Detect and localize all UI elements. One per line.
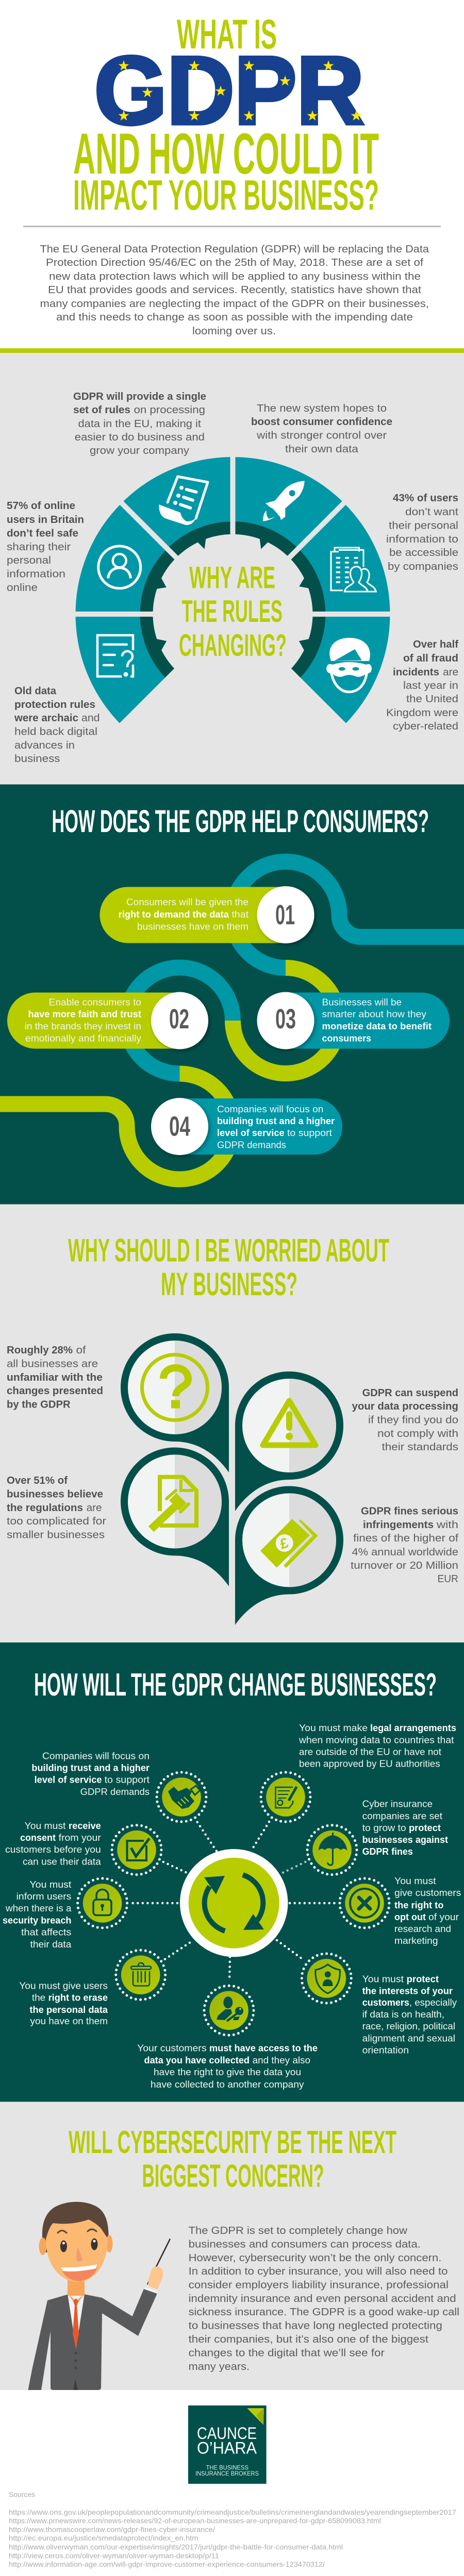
text block: single set of rules: set of rules [73,404,130,416]
panel: why should I be worried [0,1205,464,1642]
text block: over 51 percent: Over 51% of [7,1475,68,1486]
text block: cybersecurity paragraph: sickness insurance. The GDPR is a good wake-up call [189,2307,459,2318]
heading: why are the rules changing: THE RULES [181,594,283,629]
text block: cybersecurity paragraph: In addition to cyber insurance, you will also need to [189,2266,448,2277]
step 02: 02 [169,1004,189,1035]
text block: protect customers: race, religion, political [362,2021,455,2031]
step 01: that [232,909,248,920]
logo: Caunce O'Hara: CAUNCE [197,2424,257,2443]
text block: building trust [31,1751,150,1797]
text block: over 51 percent: the regulations [7,1502,83,1514]
text block: GDPR fines: with [436,1519,458,1531]
text block: fraud incidents [386,639,458,732]
step 02 [7,992,208,1049]
step 02: in the brands they invest in [25,1021,141,1031]
text block: introduction: and this needs to change as soon as possible with the impending date [56,312,413,323]
dotted connectors [133,1822,335,1981]
heading: will cybersecurity be the next biggest concern [69,2125,396,2194]
illustration: businessman with pointer [28,2202,170,2390]
text block: suspend data processing: not comply with [377,1428,458,1439]
text block: right to opt out: opt out [394,1912,426,1922]
text block: protect customers [362,1974,457,2056]
step 03: 03 [275,1004,296,1035]
text block: fraud incidents: cyber-related [393,721,458,732]
text block: right to opt out: the right to [394,1900,443,1910]
text block: cybersecurity paragraph: businesses and consumers can process data. [189,2239,421,2250]
text block: building trust: building trust and a higher [31,1762,150,1773]
step 03: consumers [322,1033,371,1044]
text block: suspend data processing: your data processing [352,1401,458,1412]
text block: cybersecurity paragraph: their companies, but it’s also one of the biggest [189,2334,428,2345]
node: contract and pen [261,1772,310,1822]
text block: legal arrangements: when moving data to countries that [299,1735,454,1745]
text block: protect customers: You must [362,1974,404,1984]
text block: GDPR fines: GDPR fines serious [361,1505,458,1517]
node: handshake [157,1772,206,1822]
panel: footer [0,2390,464,2575]
text block: GDPR fines: fines of the higher of [353,1533,458,1544]
text block: security breach: inform users [16,1891,71,1902]
text block: single set of rules: GDPR will provide a single [73,391,206,402]
text block: old data protection rules: advances in [14,740,75,751]
icon: person in circle [98,546,141,588]
text block: suspend data processing: GDPR can suspend [362,1387,458,1399]
text block: fraud incidents: are [443,667,458,678]
text block: access to data: data you have collected [144,2055,250,2065]
step 03: Businesses will be [322,997,402,1008]
text block: receive consent [5,1821,102,1867]
step 03: smarter about how they [322,1009,426,1019]
text block: access to data: have collected to another company [151,2079,304,2090]
text block: fraud incidents: last year in [403,680,458,691]
text block: building trust: level of service [35,1774,102,1785]
text block: receive consent: can use their data [23,1856,102,1867]
text block: receive consent: You must [25,1821,65,1831]
text block: legal arrangements: been approved by EU authorities [299,1758,440,1769]
text block: right to opt out: of your [428,1912,459,1922]
text block: suspend data processing: their standards [382,1442,458,1453]
text block: legal arrangements: You must make [299,1723,368,1733]
text block: GDPR fines: turnover or 20 Million [351,1560,458,1571]
text block: single set of rules: easier to do business and [75,432,205,443]
heading: why are the rules changing [179,561,287,663]
text block: suspend data processing [352,1387,458,1453]
text block: sources: http://view.ceros.com/oliver-wyman/oliver-wyman-desktop/p/11 [9,2551,219,2560]
icon: document checklist [159,477,208,525]
text block: security breach: their data [30,1939,72,1950]
icon: rocket [263,481,305,521]
text block: sources: Sources [9,2490,35,2499]
text block: right to opt out: research and [394,1924,451,1934]
text block: cybersecurity paragraph: many years. [189,2361,250,2372]
text block: suspend data processing: if they find you do [368,1415,458,1426]
node: protective shield [302,1954,351,2003]
text block: right to erase: the personal data [29,2005,108,2015]
text block: 43 percent of users: information to [386,534,458,545]
text block: right to erase: the [32,1992,45,2003]
text block: security breach: security breach [3,1916,71,1926]
text block: cybersecurity paragraph: The GDPR is set to completely change how [189,2225,408,2236]
step 04: 04 [169,1111,190,1142]
step 02: have more faith and trust [28,1009,141,1019]
step 04: level of service [217,1128,285,1138]
text block: roughly 28 percent: changes presented [7,1385,103,1397]
text block: access to data [137,2043,318,2090]
text block: cyber insurance: GDPR fines [362,1846,413,1857]
node: umbrella [307,1825,357,1875]
step 04 [151,1098,342,1155]
text block: consumer confidence: The new system hopes to [257,403,387,414]
text block: 43 percent of users: by companies [388,561,458,572]
text block: security breach: You must [29,1879,71,1890]
text block: fraud incidents: incidents [393,667,439,678]
text block: receive consent: receive [69,1821,101,1831]
step 01 [100,886,314,943]
text block: single set of rules: grow your company [90,445,189,456]
text block: cyber insurance: Cyber insurance [362,1799,433,1809]
text block: old data protection rules: protection rules [14,699,95,710]
heading: GDPR with EU stars: GDPR [94,37,364,144]
step 02: Enable consumers to [49,997,141,1008]
text block: introduction [40,244,429,337]
text block: old data protection rules: business [14,753,60,765]
icon: office building and people [331,548,376,591]
text block: 57 percent of online users [7,500,84,594]
text block: old data protection rules [14,685,100,765]
text block: 43 percent of users: their personal [389,520,458,532]
text block: security breach [3,1879,72,1950]
text block: right to erase [19,1980,108,2026]
node: check box [112,1825,161,1875]
step 04: building trust and a higher [217,1116,335,1126]
panel: title and introduction [0,0,464,348]
ribbon path connecting steps [0,861,464,1179]
text block: cyber insurance: to grow to [362,1823,406,1833]
text block: over 51 percent: smaller businesses [7,1529,105,1540]
text block: over 51 percent [7,1475,106,1540]
text block: 43 percent of users: don’t want [405,506,459,518]
step 01: businesses have on them [137,921,248,931]
text block: right to erase: You must give users [19,1980,108,1991]
pin: question mark [121,1333,229,1472]
text block: 43 percent of users [386,493,459,572]
logo: Caunce O'Hara: O’HARA [197,2439,257,2458]
heading: why are the rules changing: WHY ARE [189,561,275,595]
text block: roughly 28 percent: all businesses are [7,1358,98,1369]
text block: protect customers: alignment and sexual [362,2033,455,2043]
hub: change arrows [180,1849,288,1957]
step 03 [257,992,450,1049]
text block: fraud incidents: of all fraud [403,653,458,664]
step 04: to support [287,1128,332,1138]
text block: legal arrangements: are outside of the EU or have not [299,1747,441,1757]
step 04: Companies will focus on [217,1104,323,1114]
step 03: monetize data to benefit [322,1021,432,1031]
text block: consumer confidence: their own data [285,444,359,455]
logo: Caunce O'Hara: THE BUSINESS [206,2464,248,2471]
text block: 57 percent of online users: personal [7,555,51,566]
node: opt out cross [340,1878,389,1928]
text block: sources: http://www.information-age.com/will-gdpr-improve-customer-experience-consumers-123470312/ [9,2560,325,2568]
text block: sources: http://ec.europa.eu/justice/smedataprotect/index_en.htm [9,2534,198,2542]
text block: building trust: GDPR demands [80,1787,150,1797]
panel: how will the GDPR change businesses [0,1642,464,2102]
pin: legal document with gavel [121,1448,229,1586]
text block: receive consent: from your [59,1833,101,1843]
text block: receive consent: customers before you [5,1844,101,1855]
heading: why should I be worried about my business: MY BUSINESS? [161,1266,297,1302]
text block: old data protection rules: held back digital [14,726,97,738]
text block: cybersecurity paragraph: changes to the digital that we’ll see for [189,2348,385,2359]
panel: how does the GDPR help consumers [0,784,464,1205]
text block: access to data: and they also [253,2055,310,2065]
text block: old data protection rules: were archaic [14,713,78,724]
text block: sources [9,2490,456,2568]
step 01: 01 [275,900,295,930]
node: person and key [204,1986,254,2035]
text block: GDPR fines: EUR [437,1573,458,1585]
text block: right to erase: you have on them [30,2016,108,2026]
heading: what is: WHAT IS [177,11,277,58]
text block: single set of rules: data in the EU, making it [78,418,201,430]
text block: cybersecurity paragraph: consider employers liability insurance, professional [189,2279,449,2291]
heading: why are the rules changing: CHANGING? [179,628,287,663]
text block: 57 percent of online users: online [7,582,38,594]
heading: why should I be worried about my business [68,1232,389,1302]
step 01: Consumers will be given the [126,897,248,907]
text block: protect customers: protect [407,1974,439,1984]
text block: roughly 28 percent: by the GDPR [7,1399,71,1411]
text block: access to data: must have access to the [209,2043,318,2054]
text block: single set of rules: on processing [134,404,205,416]
text block: roughly 28 percent: Roughly 28% [7,1345,73,1356]
text block: introduction: looming over us. [192,326,276,337]
text block: introduction: The EU General Data Protection Regulation (GDPR) will be replacing the Data [40,244,429,255]
text block: 43 percent of users: be accessible [389,547,458,558]
text block: cyber insurance [362,1799,448,1857]
text block: right to erase: right to erase [48,1992,108,2003]
text block: over 51 percent: businesses believe [7,1489,103,1500]
text block: right to opt out [394,1876,461,1946]
text block: cybersecurity paragraph: However, cybersecurity won’t be the only concern. [189,2252,441,2264]
text block: consumer confidence: with stronger control over [256,430,387,441]
pin: warning triangle [235,1371,343,1511]
text block: consumer confidence: boost consumer confidence [251,416,392,428]
text block: security breach: that affects [21,1927,71,1938]
text block: 43 percent of users: 43% of users [393,493,458,504]
text block: single set of rules [73,391,206,456]
text block: right to opt out: You must [394,1876,436,1886]
step 02: emotionally and financially [25,1033,141,1044]
text block: 57 percent of online users: users in Britain [7,514,84,526]
text block: cyber insurance: protect [409,1823,441,1833]
text block: protect customers: customers [362,1997,409,2008]
text block: 57 percent of online users: don’t feel safe [7,528,78,539]
text block: sources: http://www.oliverwyman.com/our-expertise/insights/2017/jun/gdpr-the-battle-for-consumer-data.html [9,2543,343,2551]
text block: sources: http://www.thomascooperlaw.com/gdpr-fines-cyber-insurance/ [9,2526,215,2534]
text block: introduction: Protection Direction 95/46/EC on the 25th of May, 2018. These are a set of [46,257,423,268]
text block: GDPR fines: 4% annual worldwide [352,1547,458,1558]
icon: document with question mark [97,635,133,677]
text block: cybersecurity paragraph [189,2225,459,2372]
text block: fraud incidents: the United [406,693,458,705]
text block: cyber insurance: businesses against [362,1835,448,1845]
text block: roughly 28 percent: of [76,1345,86,1356]
text block: right to opt out: marketing [394,1936,438,1946]
text block: building trust: to support [105,1774,150,1785]
text block: fraud incidents: Kingdom were [386,707,458,719]
pin: money: £ [278,1535,290,1552]
step 01: right to demand the data [119,909,229,920]
text block: sources: https://www.ons.gov.uk/peoplepopulationandcommunity/crimeandjustice/bulletins/crimeinenglandandwales/yearendingseptember2017 [9,2508,456,2516]
text block: old data protection rules: and [81,713,100,724]
text block: fraud incidents: Over half [413,639,458,650]
text block: cybersecurity paragraph: to businesses that have long neglected protecting [189,2320,442,2332]
text block: introduction: new data protection laws which will be applied to any business within the [49,271,421,282]
step 04: GDPR demands [217,1140,286,1150]
text block: over 51 percent: are [87,1502,102,1514]
text block: GDPR fines [351,1505,458,1585]
text block: 57 percent of online users: sharing their [7,541,71,553]
text block: protect customers: the interests of your [362,1986,453,1996]
text block: cybersecurity paragraph: indemnity insurance and even personal accident and [189,2293,456,2304]
text block: introduction: EU that provides goods and services. Recently, statistics have shown that [48,284,421,296]
pin: money [235,1486,343,1625]
text block: protect customers: orientation [362,2045,409,2056]
text block: roughly 28 percent [7,1345,103,1411]
logo: Caunce O'Hara: INSURANCE BROKERS [195,2470,259,2477]
node: padlock [78,1878,127,1928]
text block: protect customers: if data is on health, [362,2009,444,2020]
text block: receive consent: consent [20,1833,56,1843]
text block: access to data: Your customers [137,2043,207,2054]
text block: legal arrangements: legal arrangements [370,1723,456,1733]
text block: sources: https://www.prnewswire.com/news-releases/92-of-european-businesses-are-unprepared-for-gdpr-658099083.html [9,2517,381,2525]
text block: roughly 28 percent: unfamiliar with the [7,1372,103,1383]
icon: masked thief [326,638,372,692]
text block: access to data: have the right to give the data you [154,2067,301,2077]
panel: will cybersecurity be the next biggest concern [0,2102,464,2390]
text block: building trust: Companies will focus on [42,1751,150,1761]
logo: Caunce O'Hara [188,2405,267,2484]
node: bin [116,1950,165,1999]
text block: over 51 percent: too complicated for [7,1516,106,1527]
text block: GDPR fines: infringements [363,1519,434,1531]
chart: segmented arch [68,453,398,775]
text block: legal arrangements [299,1723,456,1769]
text block: cyber insurance: companies are set [362,1811,442,1821]
text block: 57 percent of online users: information [7,569,65,580]
text block: consumer confidence [251,403,392,455]
text block: introduction: many companies are neglecting the impact of the GDPR on their businesses, [40,298,429,310]
text block: 57 percent of online users: 57% of online [7,500,75,512]
text block: protect customers: , especially [409,1997,457,2008]
text block: old data protection rules: Old data [14,685,57,697]
text block: right to opt out: give customers [394,1888,461,1898]
text block: security breach: when there is a [5,1903,72,1913]
panel: why are the rules changing [0,348,464,785]
